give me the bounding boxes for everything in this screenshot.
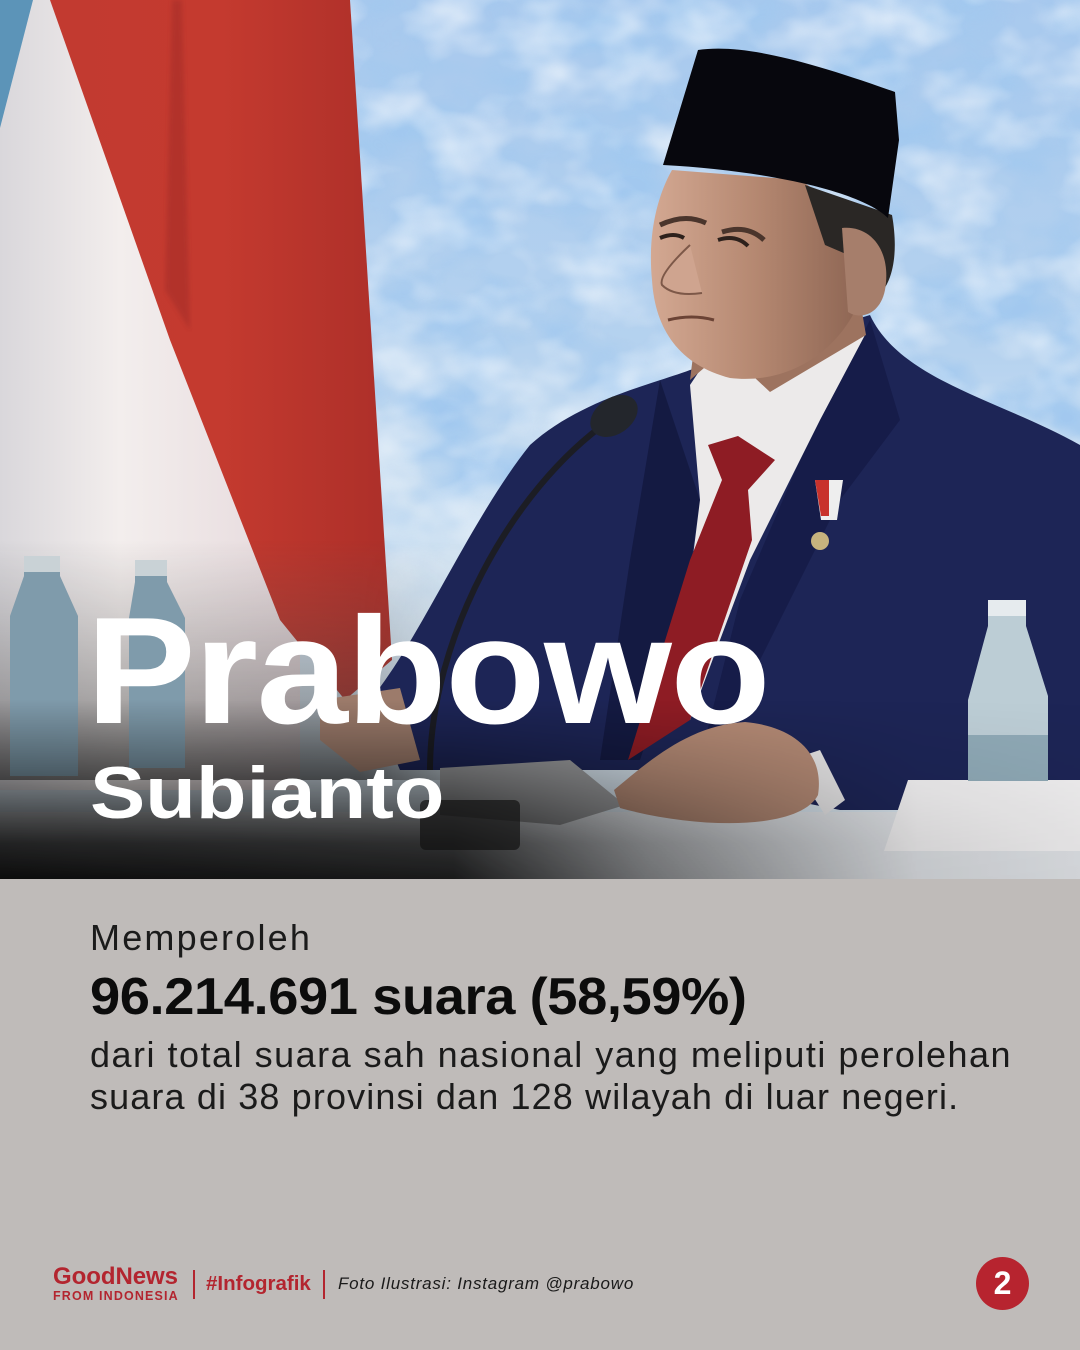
- peci cap: [663, 49, 899, 218]
- dim band behind bottles: [0, 558, 440, 780]
- label: Memperoleh: Memperoleh: [90, 917, 312, 958]
- title: Prabowo: Prabowo: [86, 586, 769, 756]
- page number badge: [976, 1257, 1029, 1310]
- papers: [440, 760, 625, 825]
- microphone: [430, 386, 646, 770]
- water bottles left: [10, 556, 185, 776]
- body: [370, 315, 1080, 810]
- bottom dark gradient: [0, 700, 1080, 879]
- photo credit: Foto Ilustrasi: Instagram @prabowo: [338, 1274, 634, 1293]
- right water bottle: [968, 600, 1048, 781]
- tie: [628, 436, 775, 760]
- lapel pin: [811, 480, 843, 550]
- hand: [320, 688, 845, 823]
- subtitle: Subianto: Subianto: [90, 753, 444, 834]
- text block: vote result: [90, 917, 1012, 1117]
- photo: Prabowo seated at a conference table with flag and blue backdrop: [0, 0, 1080, 879]
- shirt: [680, 335, 865, 720]
- page number badge: 2: [994, 1265, 1011, 1301]
- hashtag: #Infografik: [206, 1272, 311, 1295]
- flag: [0, 0, 392, 790]
- backdrop: [0, 0, 1080, 879]
- logo: GoodNews from Indonesia: GoodNews: [53, 1263, 178, 1290]
- description: dari total suara sah nasional yang meliputi perolehan: [90, 1034, 1012, 1075]
- footer: [53, 1257, 1029, 1310]
- name placard: [884, 780, 1080, 851]
- microphone base: [420, 800, 520, 850]
- description: [90, 1034, 1012, 1117]
- logo: GoodNews from Indonesia: [53, 1263, 179, 1303]
- table: [0, 812, 1080, 879]
- vote count: 96.214.691 suara (58,59%): [90, 968, 747, 1026]
- logo: GoodNews from Indonesia: FROM INDONESIA: [53, 1289, 179, 1303]
- description: suara di 38 provinsi dan 128 wilayah di luar negeri.: [90, 1076, 959, 1117]
- face and neck: [651, 170, 895, 392]
